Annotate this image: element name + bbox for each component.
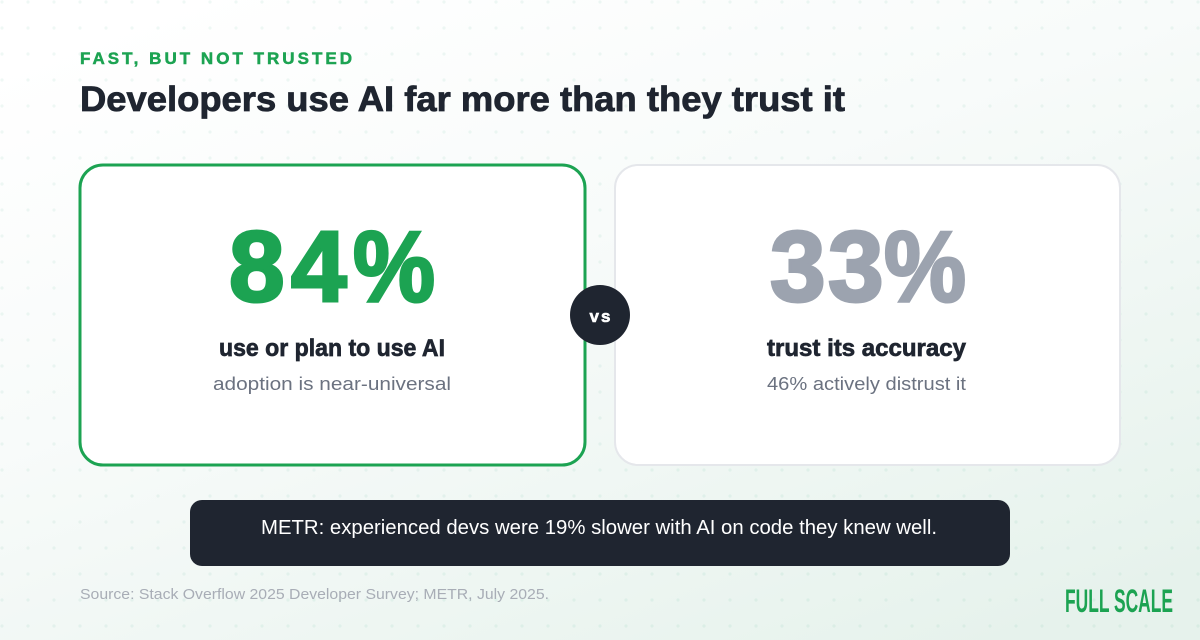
stat: 84%: 84 [229,211,347,323]
callout: METR finding [190,500,1010,566]
stat: 33% [770,211,966,323]
vs badge [570,285,630,345]
panel: trust [615,165,1120,465]
vs badge: vs [590,307,610,326]
stat: 33%: 33 [770,211,884,323]
panel: adoption [80,165,585,465]
trust note: 46% actively distrust it [767,374,966,394]
callout: METR finding: METR: experienced devs were 19% slower with AI on code they knew well. [261,517,937,539]
eyebrow heading: FAST, BUT NOT TRUSTED [80,49,352,68]
title: Developers use AI far more than they trust it [80,80,845,119]
adoption label: use or plan to use AI [219,335,445,362]
stat: 84% [229,211,435,323]
source note: Source: Stack Overflow 2025 Developer Survey; METR, July 2025. [80,586,549,603]
trust label: trust its accuracy [767,335,967,362]
adoption note: adoption is near-universal [213,374,451,394]
stat: 84%: % [353,211,435,323]
stat: 33%: % [884,211,966,323]
